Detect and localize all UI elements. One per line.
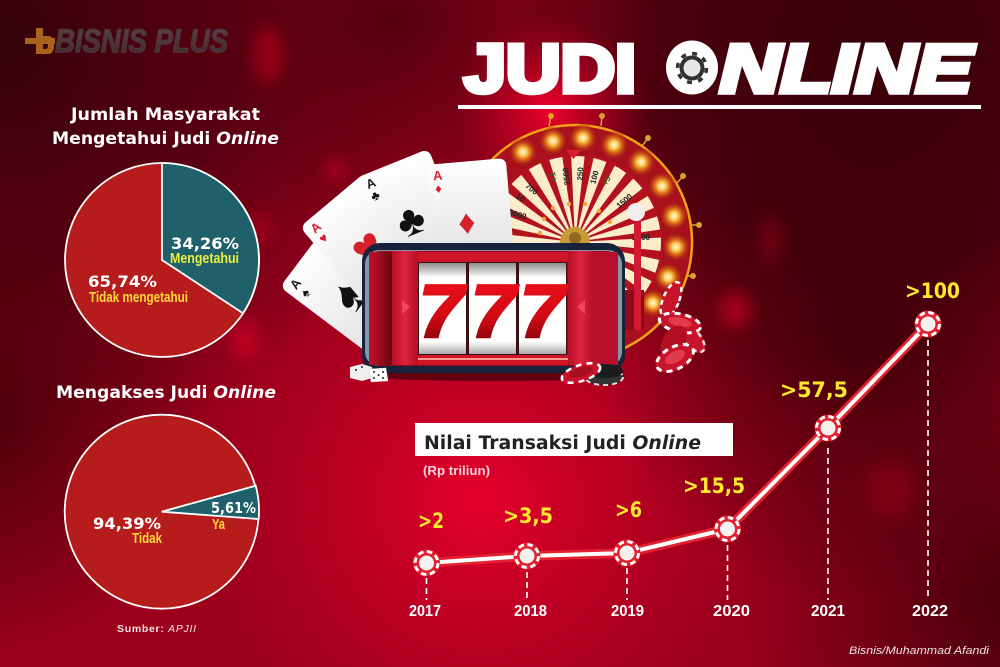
heading box: Nilai Transaksi: Nilai Transaksi Judi Online [424,433,701,454]
heading: awareness [52,105,279,149]
year axis labels: 2019 [611,603,644,620]
label: 94,39% Tidak: 94,39% [93,514,161,533]
label: 94,39% Tidak: Tidak [132,530,163,547]
title: Judi Online [458,31,981,109]
logo: Bisnis Plus [25,23,229,59]
icon: dice [350,364,388,382]
title word: JUDI: JUDI [464,31,636,107]
icon: playing card ace of hearts: ♥ [338,216,397,278]
icon: playing card ace of hearts: ♥ [316,230,331,246]
icon: poker chips front [558,358,623,388]
panel: transaction chart [409,279,960,620]
title underline [458,105,981,109]
wheel values: 2500 [561,166,572,186]
wheel values: 700 [524,181,540,197]
icon: playing card ace of spades: A [287,275,305,292]
icon: playing card ace of hearts: A [307,218,325,236]
icon: playing card ace of diamonds [426,158,515,275]
label: 5,61% Ya [211,499,256,533]
title word: NLINE: NLINE [720,31,975,107]
label: 34,26% Mengetahui: Mengetahui [170,250,239,267]
icon: playing card ace of clubs [356,149,477,299]
label: 5,61% Ya: Ya [212,516,225,533]
year axis labels: 2017 [409,603,441,620]
wheel values: +5 [601,174,613,187]
source note: Sumber: APJII [117,623,196,635]
icon: playing card ace of spades: ♠ [297,285,313,300]
icon: playing card ace of diamonds: A [432,168,444,183]
year axis labels: 2021 [811,603,845,620]
value labels: >57,5 [780,378,848,402]
slot sevens: 7 [471,270,519,353]
year axis labels: 2020 [713,603,750,620]
icon: lever [625,203,645,330]
logo wordmark: BISNIS PLUS [55,23,229,59]
slot sevens [419,270,568,353]
icon: poker chips falling [651,278,710,378]
icon: slot machine phone [362,243,625,381]
trend line [426,324,928,563]
wheel values: +1 [548,171,559,183]
heading: access: Mengakses Judi Online [56,383,276,403]
value labels: >6 [615,498,642,522]
wheel bulbs [538,202,612,235]
label: 5,61% Ya: 5,61% [211,499,256,517]
label: 34,26% Mengetahui [170,234,239,267]
panel: access pie [56,383,276,635]
value labels: >3,5 [503,504,553,528]
year axis labels: 2018 [514,603,547,620]
wheel values: 250 [576,167,585,181]
icon: playing card ace of diamonds: ♦ [457,203,477,242]
wheel values [508,166,650,242]
slot sevens: 7 [419,270,467,353]
wheel pointer [566,150,581,159]
icon: fortune wheel [490,113,702,350]
label: 65,74% Tidak mengetahui: 65,74% [88,272,157,291]
heading box: Nilai Transaksi [415,423,733,456]
label: 65,74% Tidak mengetahui: Tidak mengetahui [89,289,188,306]
pie chart: access [65,415,259,609]
label: 34,26% Mengetahui: 34,26% [171,234,239,253]
line chart [413,310,942,600]
panel: awareness pie [52,105,279,357]
wheel values: 1500 [615,192,635,210]
value labels: >100 [905,279,960,303]
slot sevens: 7 [520,270,568,353]
wheel lights [509,124,690,317]
pie chart: awareness [65,163,259,357]
value labels [418,279,960,533]
unit label: (Rp triliun) [423,463,490,478]
icon: playing card ace of diamonds: ♦ [434,181,443,196]
illustration: casino slot machine, wheel, cards and chips [280,114,710,388]
value labels: >15,5 [683,474,745,498]
label: 65,74% Tidak mengetahui [88,272,188,306]
chip markers [413,310,942,576]
heading: awareness: Mengetahui Judi Online [52,129,279,149]
wheel segments [508,154,663,296]
year axis labels [409,603,948,620]
icon: playing card ace of spades: ♠ [318,267,379,322]
icon: plus b mark [25,28,55,54]
drop lines [426,340,928,600]
wheel values: 5000 [508,208,528,221]
slot reels [418,262,567,355]
icon: playing card ace of clubs: ♣ [389,193,432,247]
icon: playing card ace of hearts [300,173,448,327]
icon: gear letter O [666,40,718,94]
slot top and bottom bars [418,252,568,262]
label: 94,39% Tidak [93,514,163,547]
wheel hub [560,227,590,243]
year axis labels: 2022 [912,603,948,620]
slot side panels [369,252,392,365]
wheel values: 10 [514,192,527,204]
heading: awareness: Jumlah Masyarakat [70,105,260,125]
icon: playing card ace of clubs: A [364,174,379,192]
wheel values: 2500 [632,233,650,242]
credit: Bisnis/Muhammad Afandi [849,645,990,657]
value labels: >2 [418,509,444,533]
wheel values: 100 [589,169,601,185]
icon: playing card ace of clubs: ♣ [368,187,382,204]
icon: playing card ace of spades [280,220,434,365]
